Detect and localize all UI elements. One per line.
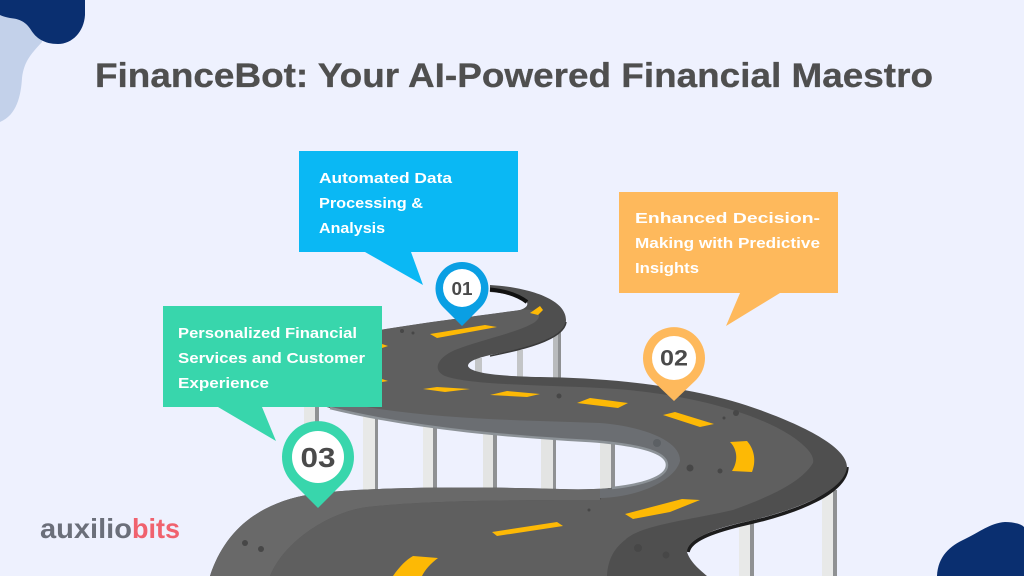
road edge shadow <box>688 467 847 552</box>
under-road rim highlight <box>330 408 667 488</box>
support pillars <box>304 330 837 576</box>
pin 01 <box>436 262 489 326</box>
top bend lower edge <box>490 322 566 356</box>
decorative blobs: top left <box>0 0 85 122</box>
pin 02: 02 <box>660 346 688 370</box>
callout 03: green: Personalized Financial <box>178 325 357 342</box>
road clipped layers <box>200 310 813 576</box>
pebbles <box>242 329 739 558</box>
pin 03: 03 <box>300 442 336 473</box>
title: FinanceBot: Your AI-Powered Financial Maestro <box>95 57 933 95</box>
logo: auxiliobits: bits <box>132 513 180 544</box>
callout 02: orange <box>619 192 838 326</box>
hole rim <box>330 400 680 498</box>
callout 03: green: Experience <box>178 375 269 392</box>
lane dashes <box>382 306 754 576</box>
callout 02: orange: Enhanced Decision- <box>635 210 820 227</box>
road surface <box>210 285 847 576</box>
callout 01: blue <box>299 151 518 285</box>
pin 02 <box>643 327 705 401</box>
callout 03: green <box>163 306 382 441</box>
winding road <box>200 285 847 576</box>
callout 01: blue: Analysis <box>319 220 385 237</box>
logo: auxiliobits: auxilio <box>40 513 132 544</box>
callout 01: blue: Processing & <box>319 195 423 212</box>
callout 03: green: Services and Customer <box>178 350 365 367</box>
lower road band <box>210 488 600 576</box>
lane surface <box>270 310 813 576</box>
pin 03 <box>282 421 354 508</box>
callout 02: orange: Making with Predictive <box>635 235 820 252</box>
callout 02: orange: Insights <box>635 260 699 277</box>
callout 01: blue: Automated Data <box>319 170 453 187</box>
top bend shadow <box>490 290 527 302</box>
logo: auxiliobits <box>40 513 180 544</box>
decorative blob: bottom right <box>937 522 1024 576</box>
pin 01: 01 <box>452 279 472 299</box>
